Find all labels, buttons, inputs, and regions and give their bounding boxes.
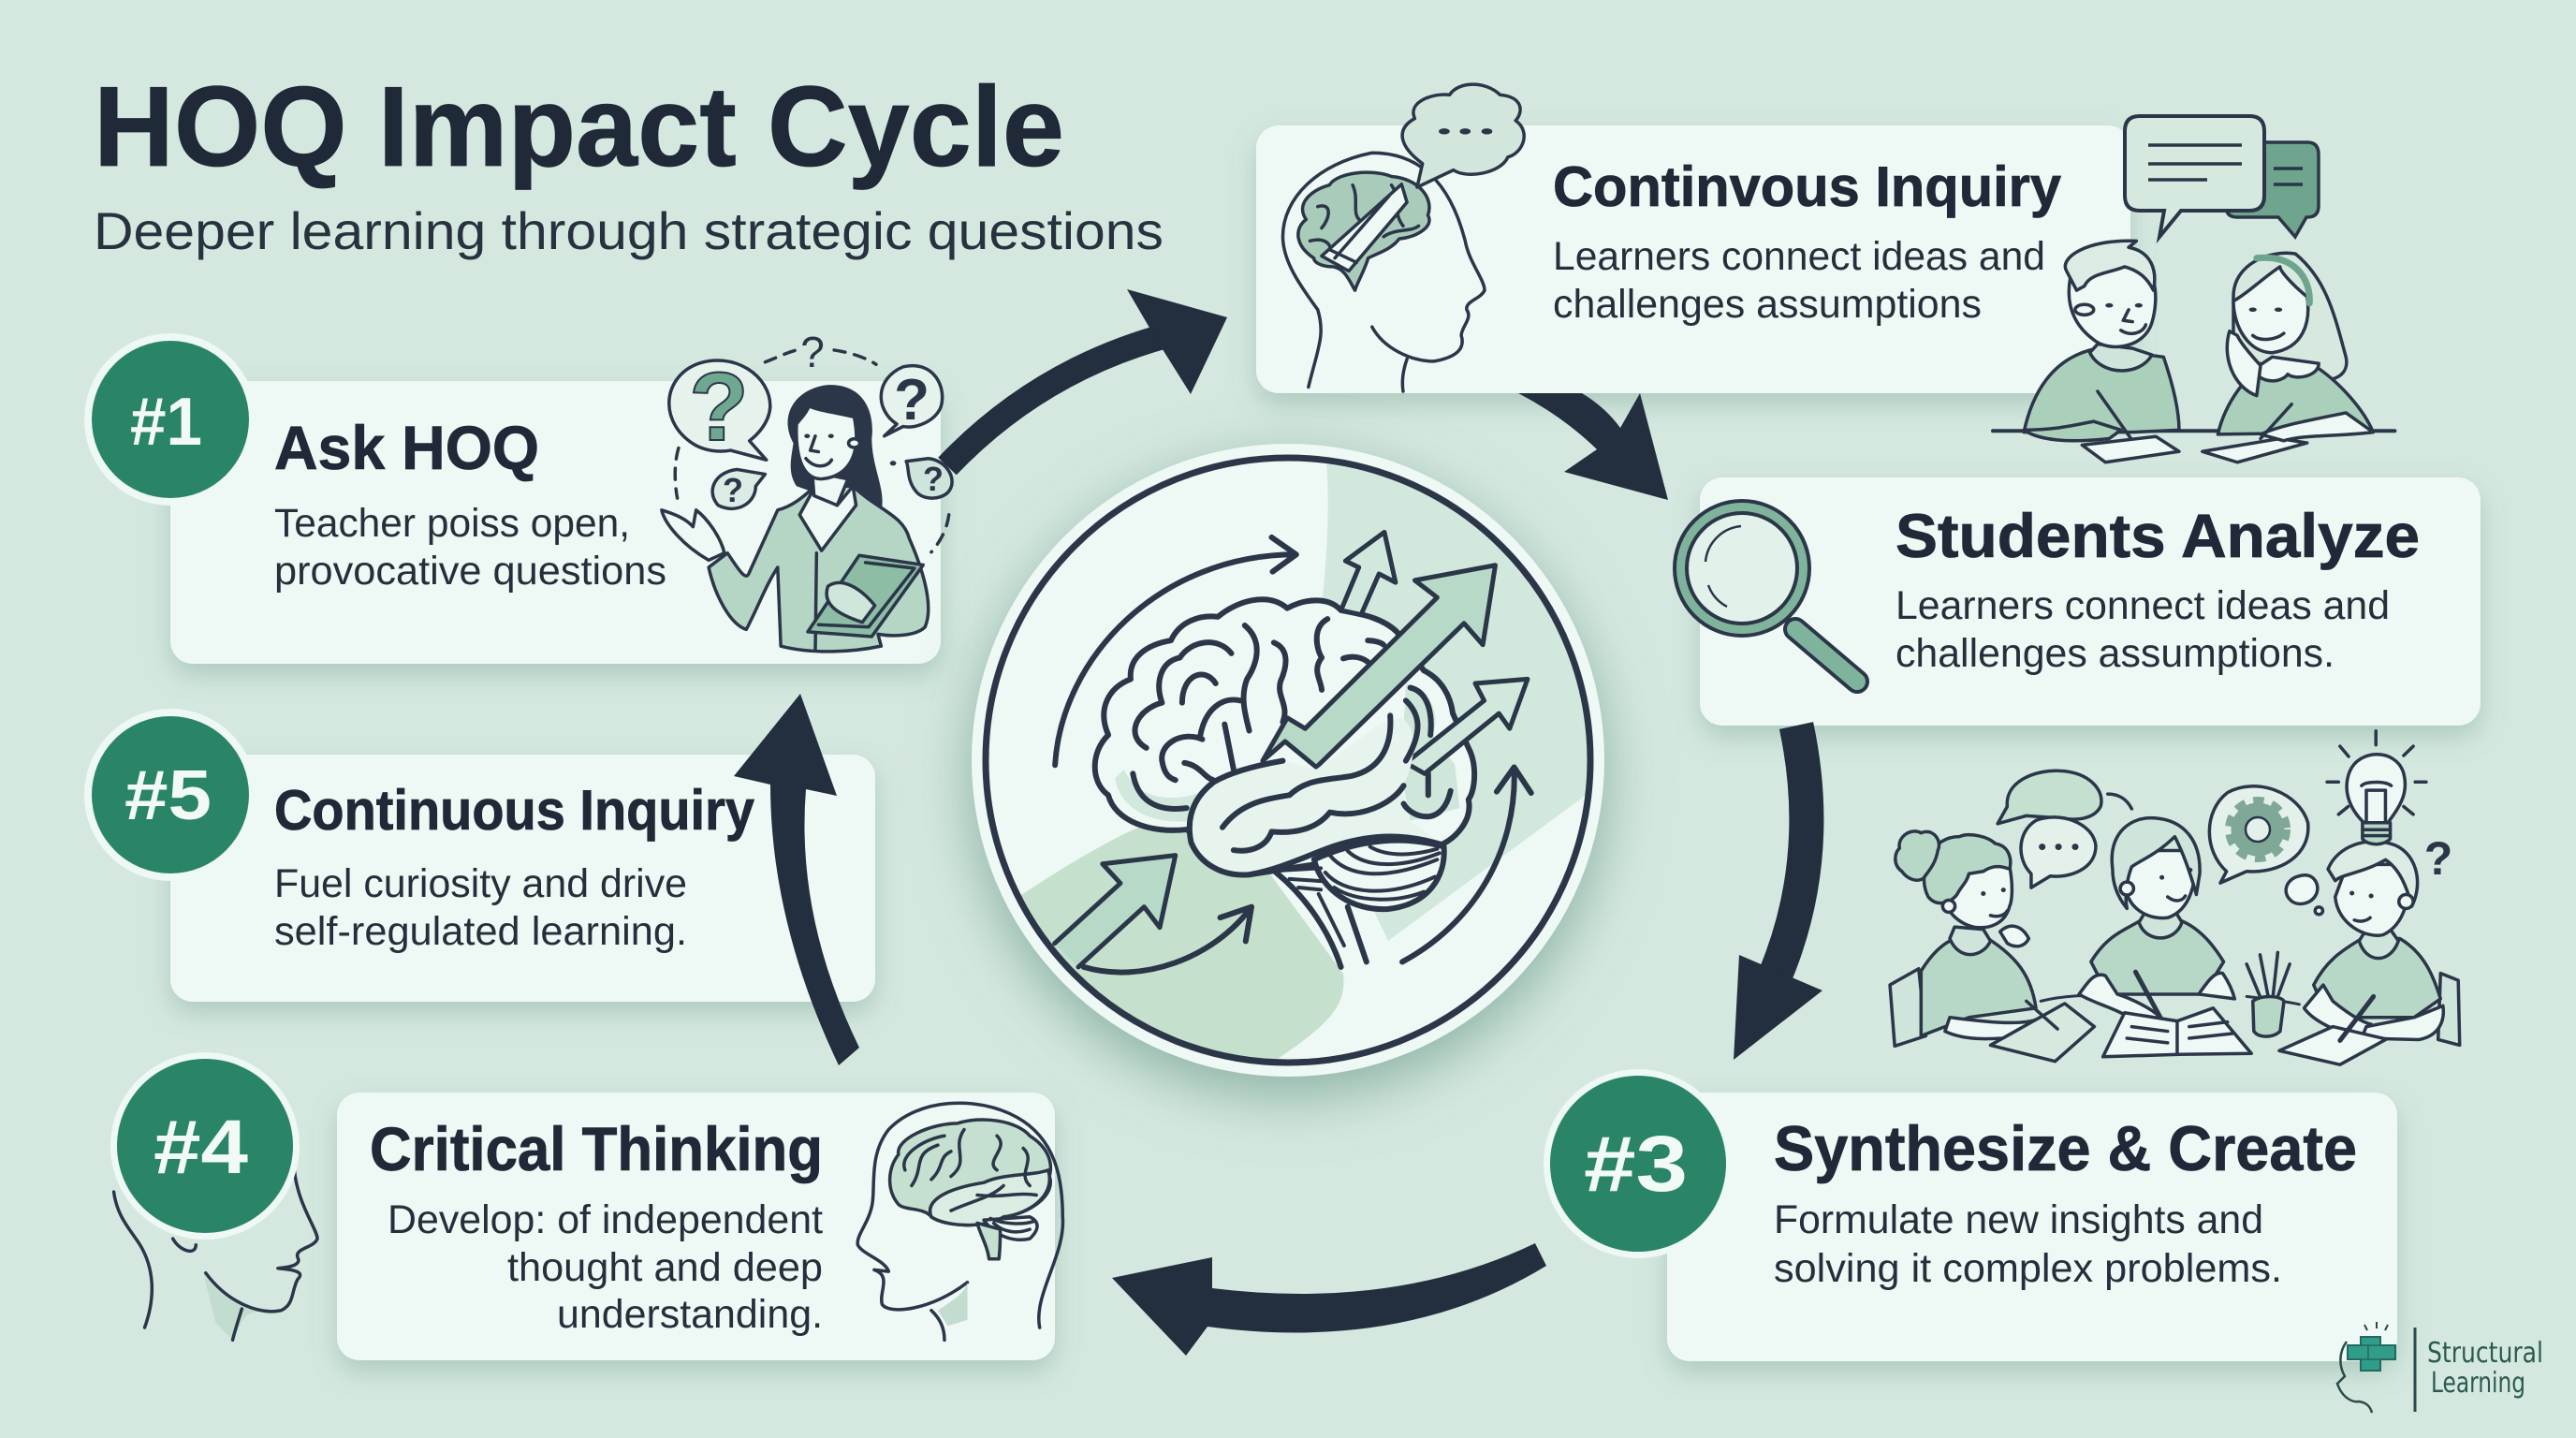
logo: Structural Learning xyxy=(2337,1322,2543,1413)
description: Develop: of independent xyxy=(388,1197,823,1242)
central brain medallion xyxy=(972,444,1604,1077)
icon: teacher with question bubbles: ? xyxy=(800,328,825,376)
step 2: students analyze content xyxy=(1675,501,2420,682)
step 4: critical thinking content xyxy=(110,1052,1062,1340)
icon: curved arrow top-left xyxy=(1055,537,1296,765)
panel: critical thinking card xyxy=(337,1093,1055,1360)
heading: Continvous Inquiry xyxy=(1553,155,2062,218)
panel: continvous inquiry top card xyxy=(1256,125,2130,393)
description: Teacher poiss open, xyxy=(274,501,630,546)
panel: continuous inquiry step 5 card xyxy=(170,755,875,1002)
icon: two students at table xyxy=(1993,241,2394,462)
heading: Students Analyze xyxy=(1895,501,2420,570)
description: Formulate new insights and xyxy=(1774,1197,2263,1242)
icon: teacher with question bubbles: ? xyxy=(689,353,749,462)
description xyxy=(1895,583,2390,676)
icon: group of students collaborating: ? xyxy=(2424,832,2452,885)
badge #3: #3 xyxy=(1584,1120,1688,1208)
title: HOQ Impact Cycle xyxy=(94,63,1064,190)
arrow: continvous inquiry to students analyze xyxy=(1518,393,1668,500)
description: challenges assumptions. xyxy=(1895,631,2334,676)
step 5: continuous inquiry content xyxy=(84,709,755,954)
panel: synthesize and create card xyxy=(1667,1093,2397,1361)
arrow: synthesize to critical thinking xyxy=(1112,1243,1546,1356)
icon: bottom-left rising arrow xyxy=(1055,856,1176,967)
description: Learners connect ideas and xyxy=(1553,234,2045,279)
top step: continvous inquiry content xyxy=(1282,84,2394,462)
description xyxy=(388,1197,823,1337)
icon: teacher with question bubbles: ? xyxy=(894,368,929,433)
badge #4: #4 xyxy=(154,1105,248,1190)
heading: Ask HOQ xyxy=(274,413,539,482)
icon: head with brain, pencil and thought cloud xyxy=(1282,84,1524,391)
icon: teacher with question bubbles: ? xyxy=(723,471,743,509)
arrow: students analyze to synthesize xyxy=(1734,726,1822,1060)
description xyxy=(1553,234,2045,327)
step 3: synthesize and create content xyxy=(1544,1069,2357,1291)
icon: main rising arrow xyxy=(1263,565,1496,767)
badge #1: #1 xyxy=(130,385,202,460)
arrow: critical thinking to ask xyxy=(734,694,859,1065)
subtitle: Deeper learning through strategic questions xyxy=(94,201,1164,260)
badge #1 xyxy=(84,333,256,506)
description: understanding. xyxy=(557,1292,823,1337)
icon: teacher with question bubbles: ? xyxy=(923,460,944,498)
icon: cerebellum xyxy=(1314,841,1444,909)
icon: head with brain xyxy=(857,1103,1062,1340)
description: solving it complex problems. xyxy=(1774,1246,2282,1291)
description: self-regulated learning. xyxy=(274,909,687,954)
icon: curved arrow bottom xyxy=(1084,907,1251,973)
badge #5 xyxy=(84,709,256,881)
panel: students analyze card xyxy=(1700,477,2481,726)
icon: gear xyxy=(2230,801,2286,858)
description: challenges assumptions xyxy=(1553,282,1982,327)
icon: teacher with question bubbles xyxy=(662,328,952,652)
badge #3 xyxy=(1544,1069,1733,1258)
description: provocative questions xyxy=(274,549,666,594)
icon: right small arrow xyxy=(1406,679,1528,773)
step 1: ask HOQ content xyxy=(84,328,952,652)
heading: Synthesize & Create xyxy=(1774,1113,2357,1184)
arrow: ask to continvous inquiry xyxy=(947,289,1227,466)
description xyxy=(274,501,666,594)
icon: group of students collaborating xyxy=(1890,731,2460,1064)
description xyxy=(1774,1197,2282,1291)
icon: left head profile xyxy=(114,1170,317,1340)
icon: curved arrow right xyxy=(1402,767,1531,961)
icon: magnifying glass xyxy=(1675,501,1857,682)
description: thought and deep xyxy=(507,1245,823,1290)
logo: Structural Learning: Structural xyxy=(2427,1337,2543,1370)
description xyxy=(274,861,687,954)
badge #5: #5 xyxy=(124,756,212,834)
heading: Continuous Inquiry xyxy=(274,779,755,842)
icon: speech bubbles xyxy=(2125,116,2319,237)
description: Learners connect ideas and xyxy=(1895,583,2390,628)
description: Fuel curiosity and drive xyxy=(274,861,687,906)
heading: Critical Thinking xyxy=(370,1114,823,1183)
panel: ask HOQ card xyxy=(170,381,941,664)
icon: top small arrow xyxy=(1341,532,1396,615)
badge #4 xyxy=(110,1052,300,1240)
logo: Structural Learning: Learning xyxy=(2431,1367,2525,1400)
